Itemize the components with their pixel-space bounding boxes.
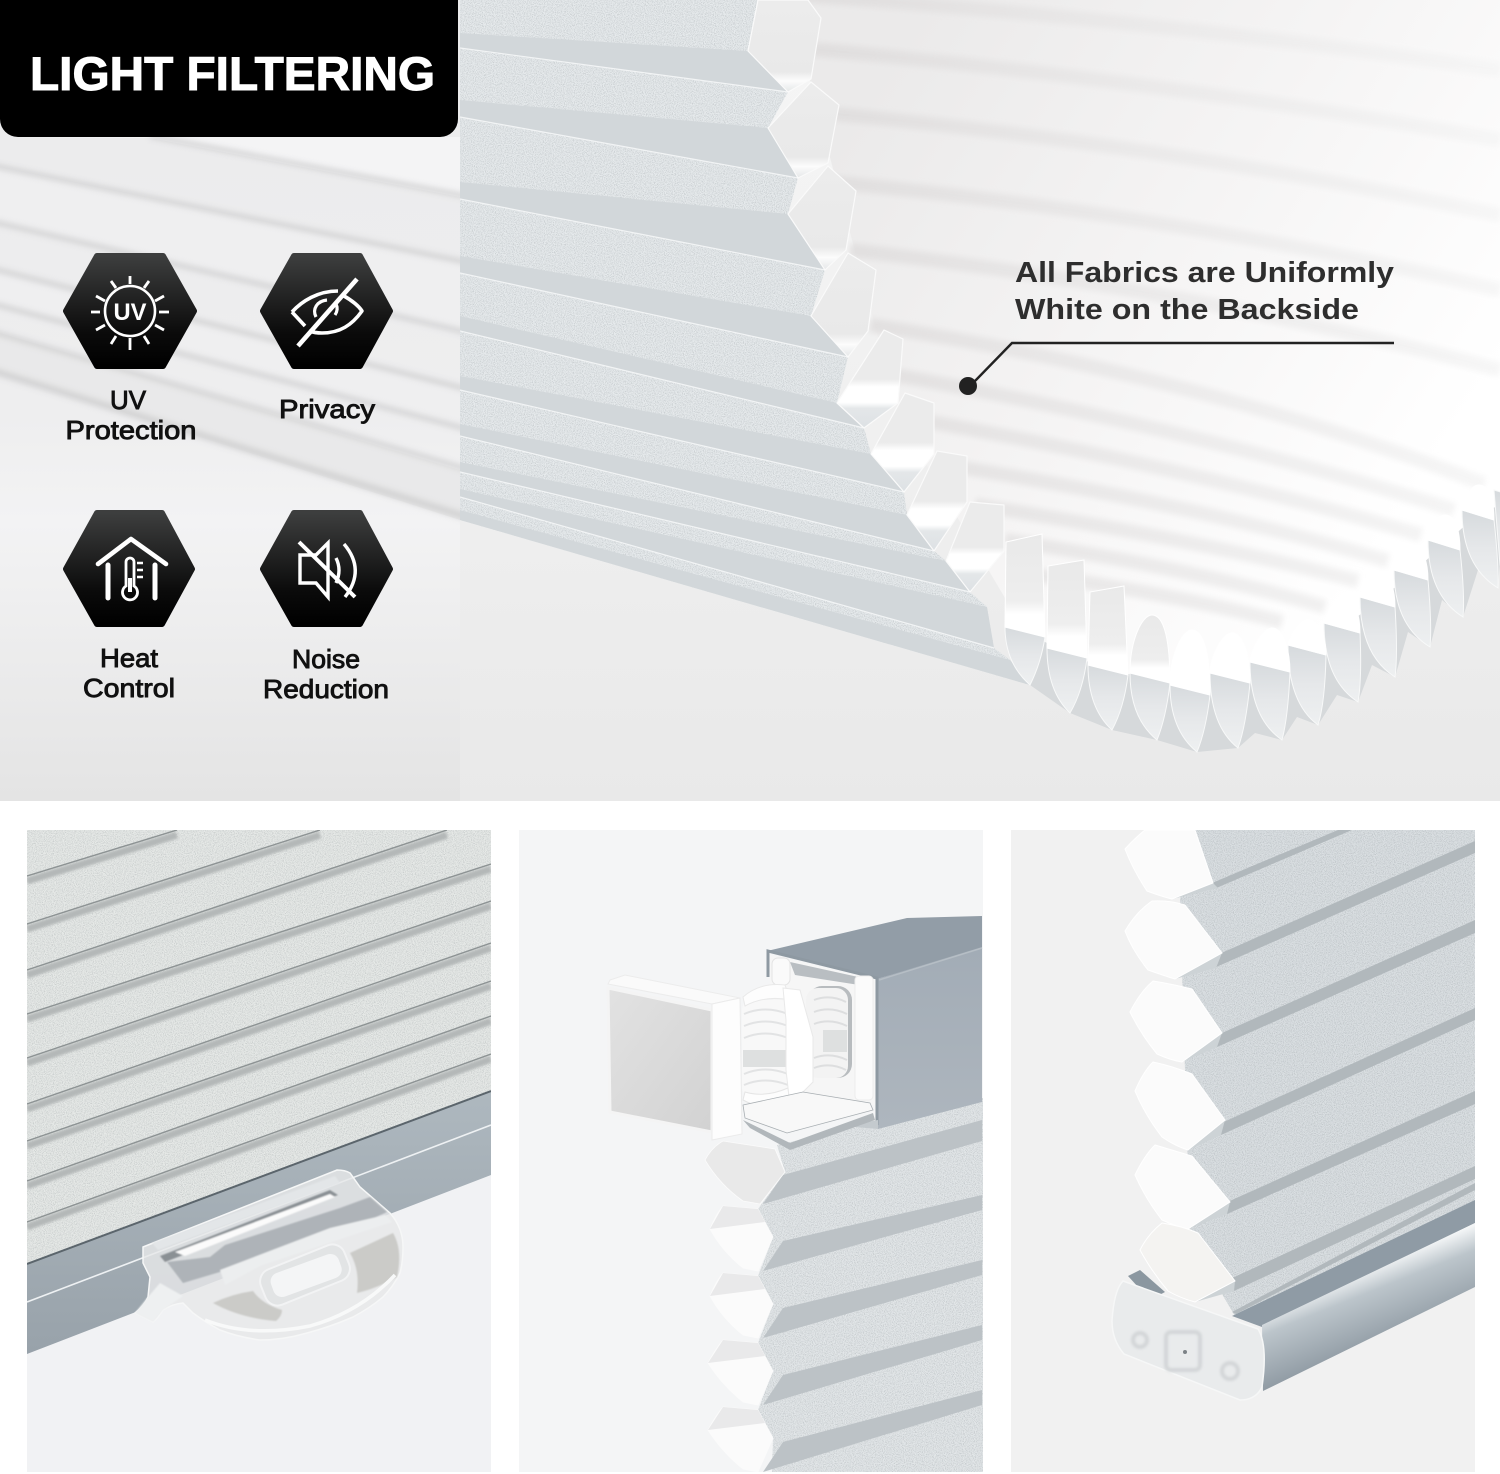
label: UV Protection — [66, 385, 196, 445]
square end cap — [608, 975, 742, 1140]
white fabric backside — [790, 0, 1500, 690]
feature: noise reduction — [263, 513, 390, 704]
bottom bar with end cap — [1112, 1200, 1475, 1400]
pleated fabric — [27, 830, 491, 1264]
panel: hero fabric close-up — [460, 0, 1500, 801]
label: Noise Reduction: Noise — [292, 644, 360, 674]
label: Heat Control: Control — [83, 673, 175, 703]
feature: UV protection — [66, 256, 196, 445]
icon: house with thermometer — [66, 513, 192, 624]
flat fabric stack — [743, 1092, 875, 1150]
panel: left features background — [0, 0, 470, 801]
fabric rows with white cell ends — [705, 1098, 983, 1472]
label: Heat Control: Heat — [100, 643, 159, 673]
icon: UV sun: UV — [114, 299, 146, 326]
label: UV Protection: Protection — [66, 415, 196, 445]
label: Heat Control — [83, 643, 175, 703]
icon: clear pull handle — [135, 1170, 403, 1340]
spring cylinder and nut — [742, 984, 852, 1108]
feature: privacy — [263, 256, 390, 424]
label: UV Protection: UV — [110, 385, 147, 415]
icon: UV sun — [66, 256, 194, 366]
callout: backside note — [959, 257, 1394, 395]
label: Noise Reduction — [263, 644, 389, 704]
grey textured fabric — [1172, 830, 1475, 1316]
icon: muted speaker — [263, 513, 390, 624]
panel: fabric cell ends and bottom bar — [1011, 830, 1475, 1472]
open fabric cell ends along the stair edge — [748, 0, 1004, 592]
fabric cell ends along the lower arc — [1005, 485, 1500, 752]
callout: backside note: White on the Backside — [1015, 294, 1359, 326]
panel: head rail end cap and spring — [519, 830, 983, 1472]
label: Noise Reduction: Reduction — [263, 674, 389, 704]
grey bottom rail — [27, 1091, 491, 1354]
label: Privacy: Privacy — [279, 394, 375, 424]
panel: bottom rail and clear pull handle — [27, 830, 491, 1472]
title badge: LIGHT FILTERING — [30, 47, 435, 100]
title badge — [0, 0, 458, 137]
icon: crossed eye — [263, 256, 390, 366]
callout: backside note: All Fabrics are Uniformly — [1015, 257, 1394, 289]
white cell ends — [1125, 830, 1235, 1302]
grey fabric face with pleated rows — [460, 0, 1030, 685]
head rail box — [767, 916, 982, 1129]
feature: heat control — [66, 513, 192, 703]
